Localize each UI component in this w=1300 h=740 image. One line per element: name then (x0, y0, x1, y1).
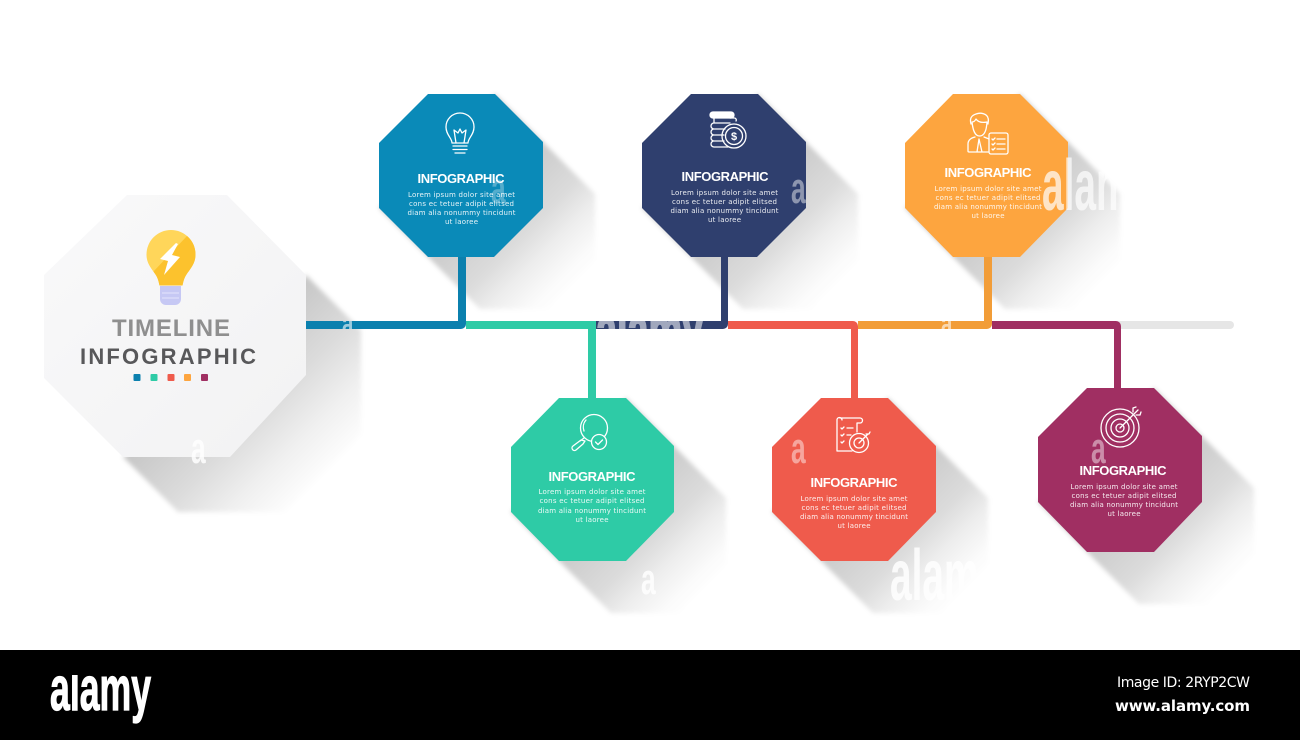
watermark overlay: a (791, 163, 806, 213)
long shadows behind the shapes (123, 94, 1254, 613)
watermark overlay: a (641, 554, 656, 604)
orange segment (858, 257, 992, 329)
body text: cons ec tetuer adipit elitsed (540, 497, 644, 505)
watermark overlay: alam (890, 537, 979, 616)
heading: INFOGRAPHIC (682, 169, 769, 184)
heading: INFOGRAPHIC (1080, 463, 1167, 478)
body text: ut laoree (445, 218, 478, 226)
icon: archery target (1101, 407, 1141, 447)
body text: Lorem ipsum dolor site amet (1070, 483, 1178, 491)
body text: cons ec tetuer adipit elitsed (409, 200, 514, 208)
teal segment (466, 321, 596, 398)
panel: step 4 red (772, 398, 936, 561)
alamy logo: alamy (50, 654, 151, 723)
watermark stripes on timeline (342, 321, 951, 329)
image id: Image ID: 2RYP2CW (1117, 675, 1250, 691)
watermark stripes on timeline: a (342, 305, 354, 342)
body text: Lorem ipsum dolor site amet (671, 189, 778, 197)
body text (538, 488, 646, 524)
panel: step 2 green (511, 398, 674, 561)
body text: Lorem ipsum dolor site amet (800, 495, 908, 503)
body text: Lorem ipsum dolor site amet (538, 488, 646, 496)
watermark overlay: a (191, 423, 206, 473)
heading: TIMELINE: TIMELINE (112, 315, 230, 342)
watermark overlay (191, 147, 1131, 616)
body text: ut laoree (972, 212, 1004, 220)
body text (408, 191, 516, 226)
icon: outline light bulb (446, 113, 474, 153)
body text: diam alia nonummy tincidunt (670, 207, 779, 215)
body text: ut laoree (838, 522, 870, 530)
heading: INFOGRAPHIC: INFOGRAPHIC (80, 344, 256, 369)
body text: cons ec tetuer adipit elitsed (672, 198, 777, 206)
grey track end (1115, 321, 1234, 329)
watermark stripes on timeline: a (941, 305, 953, 342)
body text: cons ec tetuer adipit elitsed (936, 194, 1040, 202)
watermark overlay: a (491, 163, 506, 213)
icon: checklist with target (837, 418, 870, 452)
panel: step 3 navy (642, 94, 806, 257)
watermark stripes on timeline: alamy (596, 296, 703, 363)
body text: diam alia nonummy tincidunt (538, 507, 646, 515)
panel: timeline infographic hub (44, 195, 306, 457)
body text: ut laoree (708, 216, 741, 224)
heading: INFOGRAPHIC (548, 469, 636, 484)
icon label: dollar sign: $ (731, 131, 737, 143)
timeline track (306, 257, 1234, 398)
body text: cons ec tetuer adipit elitsed (802, 504, 906, 512)
heading: INFOGRAPHIC (418, 171, 505, 186)
body text: ut laoree (1108, 510, 1140, 518)
panel: step 1 blue (379, 94, 543, 257)
website: www.alamy.com (1115, 697, 1250, 715)
red segment (728, 321, 858, 398)
body text: diam alia nonummy tincidunt (934, 203, 1042, 211)
body text: Lorem ipsum dolor site amet (934, 185, 1042, 193)
blue segment (306, 257, 466, 329)
body text (670, 189, 779, 224)
body text (800, 495, 908, 530)
footer bar (0, 650, 1300, 740)
body text: diam alia nonummy tincidunt (1070, 501, 1178, 509)
body text: ut laoree (576, 516, 608, 524)
panel: step 6 purple (1038, 388, 1202, 552)
watermark overlay: alam (1042, 147, 1131, 226)
watermark overlay: a (791, 423, 806, 473)
body text: diam alia nonummy tincidunt (408, 209, 516, 217)
icon: person with checklist (968, 113, 1008, 154)
heading: INFOGRAPHIC (944, 165, 1032, 180)
body text: diam alia nonummy tincidunt (800, 513, 908, 521)
watermark overlay: a (1091, 423, 1106, 473)
colour legend dots (134, 374, 208, 381)
body text (934, 185, 1042, 220)
icon: magnifier with check (572, 414, 608, 450)
panel: step 5 orange (905, 94, 1068, 257)
navy segment (596, 257, 728, 329)
body text: Lorem ipsum dolor site amet (408, 191, 515, 199)
body text (1070, 483, 1178, 518)
icon: yellow light bulb (146, 230, 196, 305)
body text: cons ec tetuer adipit elitsed (1072, 492, 1176, 500)
heading: INFOGRAPHIC (810, 475, 898, 490)
purple segment (992, 321, 1121, 388)
icon: coins with dollar (710, 112, 746, 148)
